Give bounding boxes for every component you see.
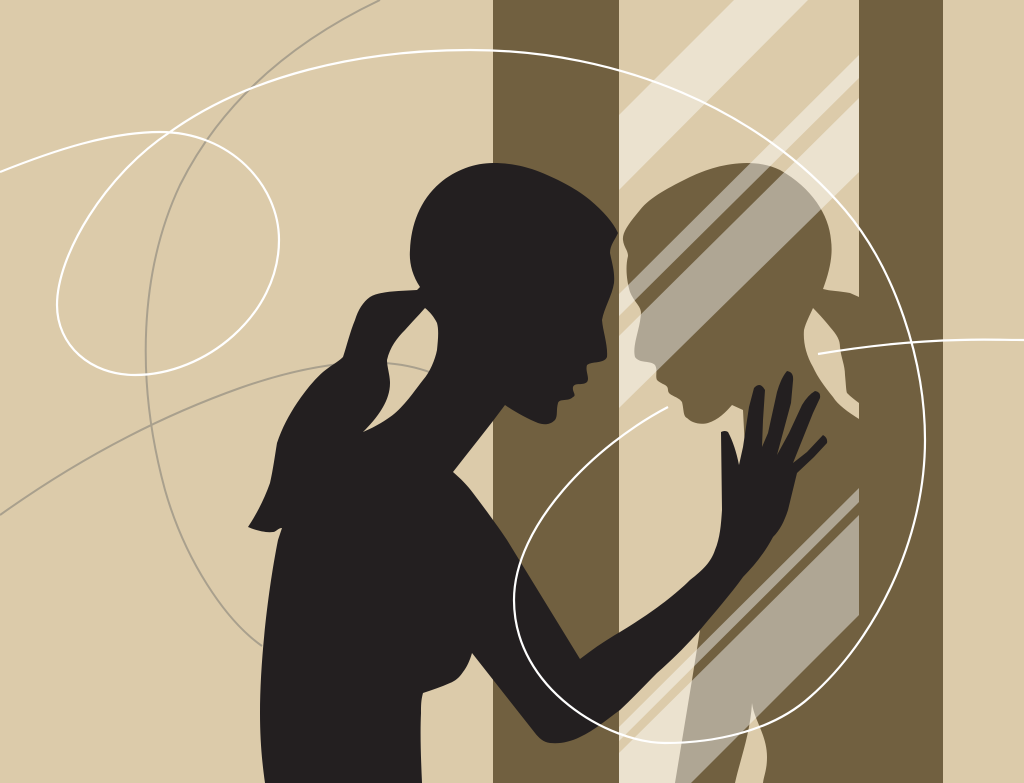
mirror glare streaks [619,0,859,783]
white looping thread [0,50,925,743]
woman silhouette [248,163,827,783]
mirror reflection silhouette [623,163,859,783]
white thread end right [818,340,1024,354]
right brown stripe [859,0,943,783]
grey thread lines [0,0,432,646]
left brown stripe [493,0,619,783]
